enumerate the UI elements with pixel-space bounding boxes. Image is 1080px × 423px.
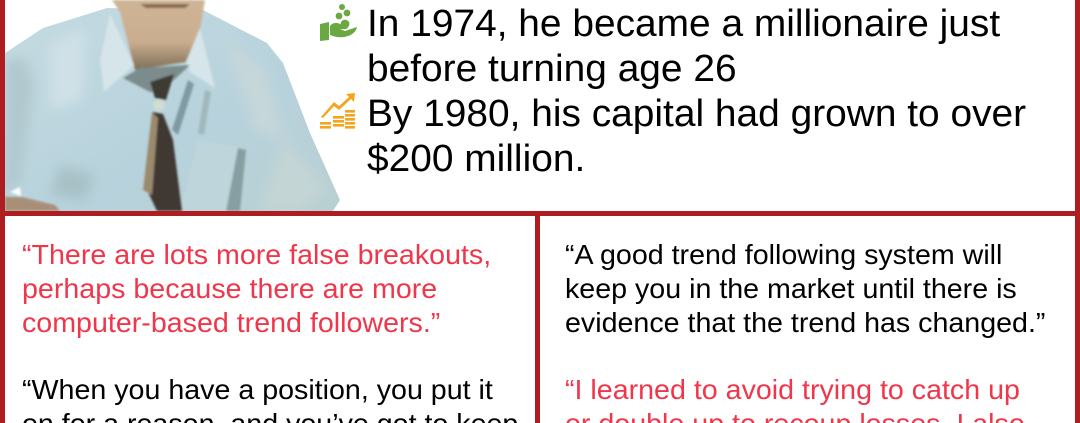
text: capital fact: By 1980, his capital had grown to over — [367, 93, 1026, 135]
quote: catch up — [565, 374, 1025, 423]
quote: false breakouts: perhaps because there are more — [22, 273, 437, 304]
text: millionaire fact — [367, 3, 1000, 90]
quote: false breakouts: computer-based trend followers.” — [22, 307, 440, 338]
quote: false breakouts — [22, 239, 491, 338]
quote: catch up: “I learned to avoid trying to catch up — [565, 374, 1020, 405]
quote: position — [22, 374, 518, 423]
quote: trend following system: evidence that the trend has changed.” — [565, 307, 1045, 338]
portrait photo of trader — [5, 0, 340, 211]
text: millionaire fact: before turning age 26 — [367, 48, 737, 90]
quote: false breakouts: “There are lots more false breakouts, — [22, 239, 491, 270]
icon: rising arrow with coin stacks — [320, 93, 355, 129]
quote: trend following system: “A good trend following system will — [565, 239, 1002, 270]
text: capital fact — [367, 93, 1026, 180]
text: capital fact: $200 million. — [367, 138, 585, 180]
quote: trend following system — [565, 239, 1045, 338]
text: millionaire fact: In 1974, he became a millionaire just — [367, 3, 1000, 45]
icon: hand with coins — [320, 4, 357, 41]
quote: position: “When you have a position, you put it — [22, 374, 493, 405]
quote: trend following system: keep you in the market until there is — [565, 273, 1017, 304]
